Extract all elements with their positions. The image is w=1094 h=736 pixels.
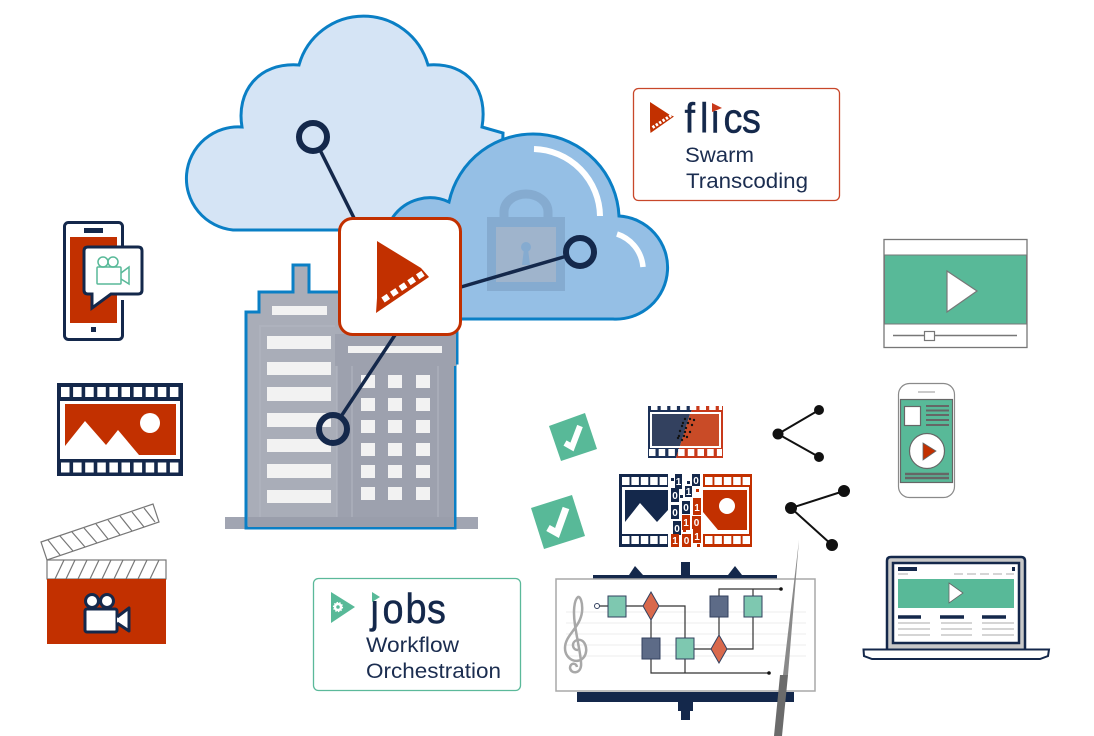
music stand <box>577 562 794 720</box>
icon: film strip converting to binary <box>619 474 752 547</box>
binary digit tiles: 0 <box>694 518 700 529</box>
icon: jobs gear play logo <box>331 592 355 623</box>
icon: padlock <box>487 194 565 291</box>
icon: film strip with landscape image <box>57 383 183 476</box>
workflow nodes <box>594 587 783 675</box>
binary digit tiles: 0 <box>693 476 699 487</box>
icon: clapperboard with camera <box>41 504 166 644</box>
icon: share nodes lower <box>786 486 849 550</box>
jobs description: Orchestration <box>366 660 501 683</box>
binary digit tiles <box>671 474 701 547</box>
conductor baton <box>774 540 799 736</box>
jobs workflow orchestration card <box>314 578 520 690</box>
icon: video player <box>884 240 1027 348</box>
binary digit tiles: 1 <box>672 536 678 547</box>
central hybrid cloud and building diagram <box>186 16 668 529</box>
binary digit tiles: 1 <box>686 487 692 498</box>
binary digit tiles: 1 <box>694 532 700 543</box>
workflow score on conductor stand <box>556 540 815 736</box>
icon: laptop with video page <box>864 557 1049 659</box>
binary digit tiles: 1 <box>676 477 682 488</box>
icon: share nodes upper <box>774 406 823 461</box>
binary digit tiles: 1 <box>694 503 700 514</box>
network connectors and nodes <box>299 123 594 443</box>
binary digit tiles: 0 <box>684 536 690 547</box>
icon: smartphone with video chat bubble <box>64 222 142 340</box>
binary digit tiles: 0 <box>672 491 678 502</box>
jobs description: Workflow <box>366 634 460 657</box>
binary digit tiles: 0 <box>683 503 689 514</box>
binary digit tiles: 0 <box>672 508 678 519</box>
binary digit tiles: 1 <box>683 518 689 529</box>
jobs wordmark: jobs <box>370 586 446 632</box>
icon: transcoding film strip small <box>648 406 723 458</box>
icon: flics play logo <box>650 102 674 133</box>
flics description: Transcoding <box>686 170 808 193</box>
icon: check badge lower <box>531 495 585 549</box>
binary digit tiles: 0 <box>674 524 680 535</box>
icon: check badge upper <box>549 413 597 461</box>
flics wordmark: flics <box>685 96 761 142</box>
flics description: Swarm <box>685 144 754 167</box>
icon: mobile video page <box>898 384 954 498</box>
on-premises building <box>225 265 478 529</box>
light public cloud <box>186 16 503 230</box>
icon: treble clef <box>565 597 586 672</box>
central flics play icon tile <box>340 218 460 334</box>
secure private cloud <box>380 134 668 319</box>
workflow connector lines <box>597 589 781 673</box>
flics swarm transcoding card <box>634 88 840 200</box>
